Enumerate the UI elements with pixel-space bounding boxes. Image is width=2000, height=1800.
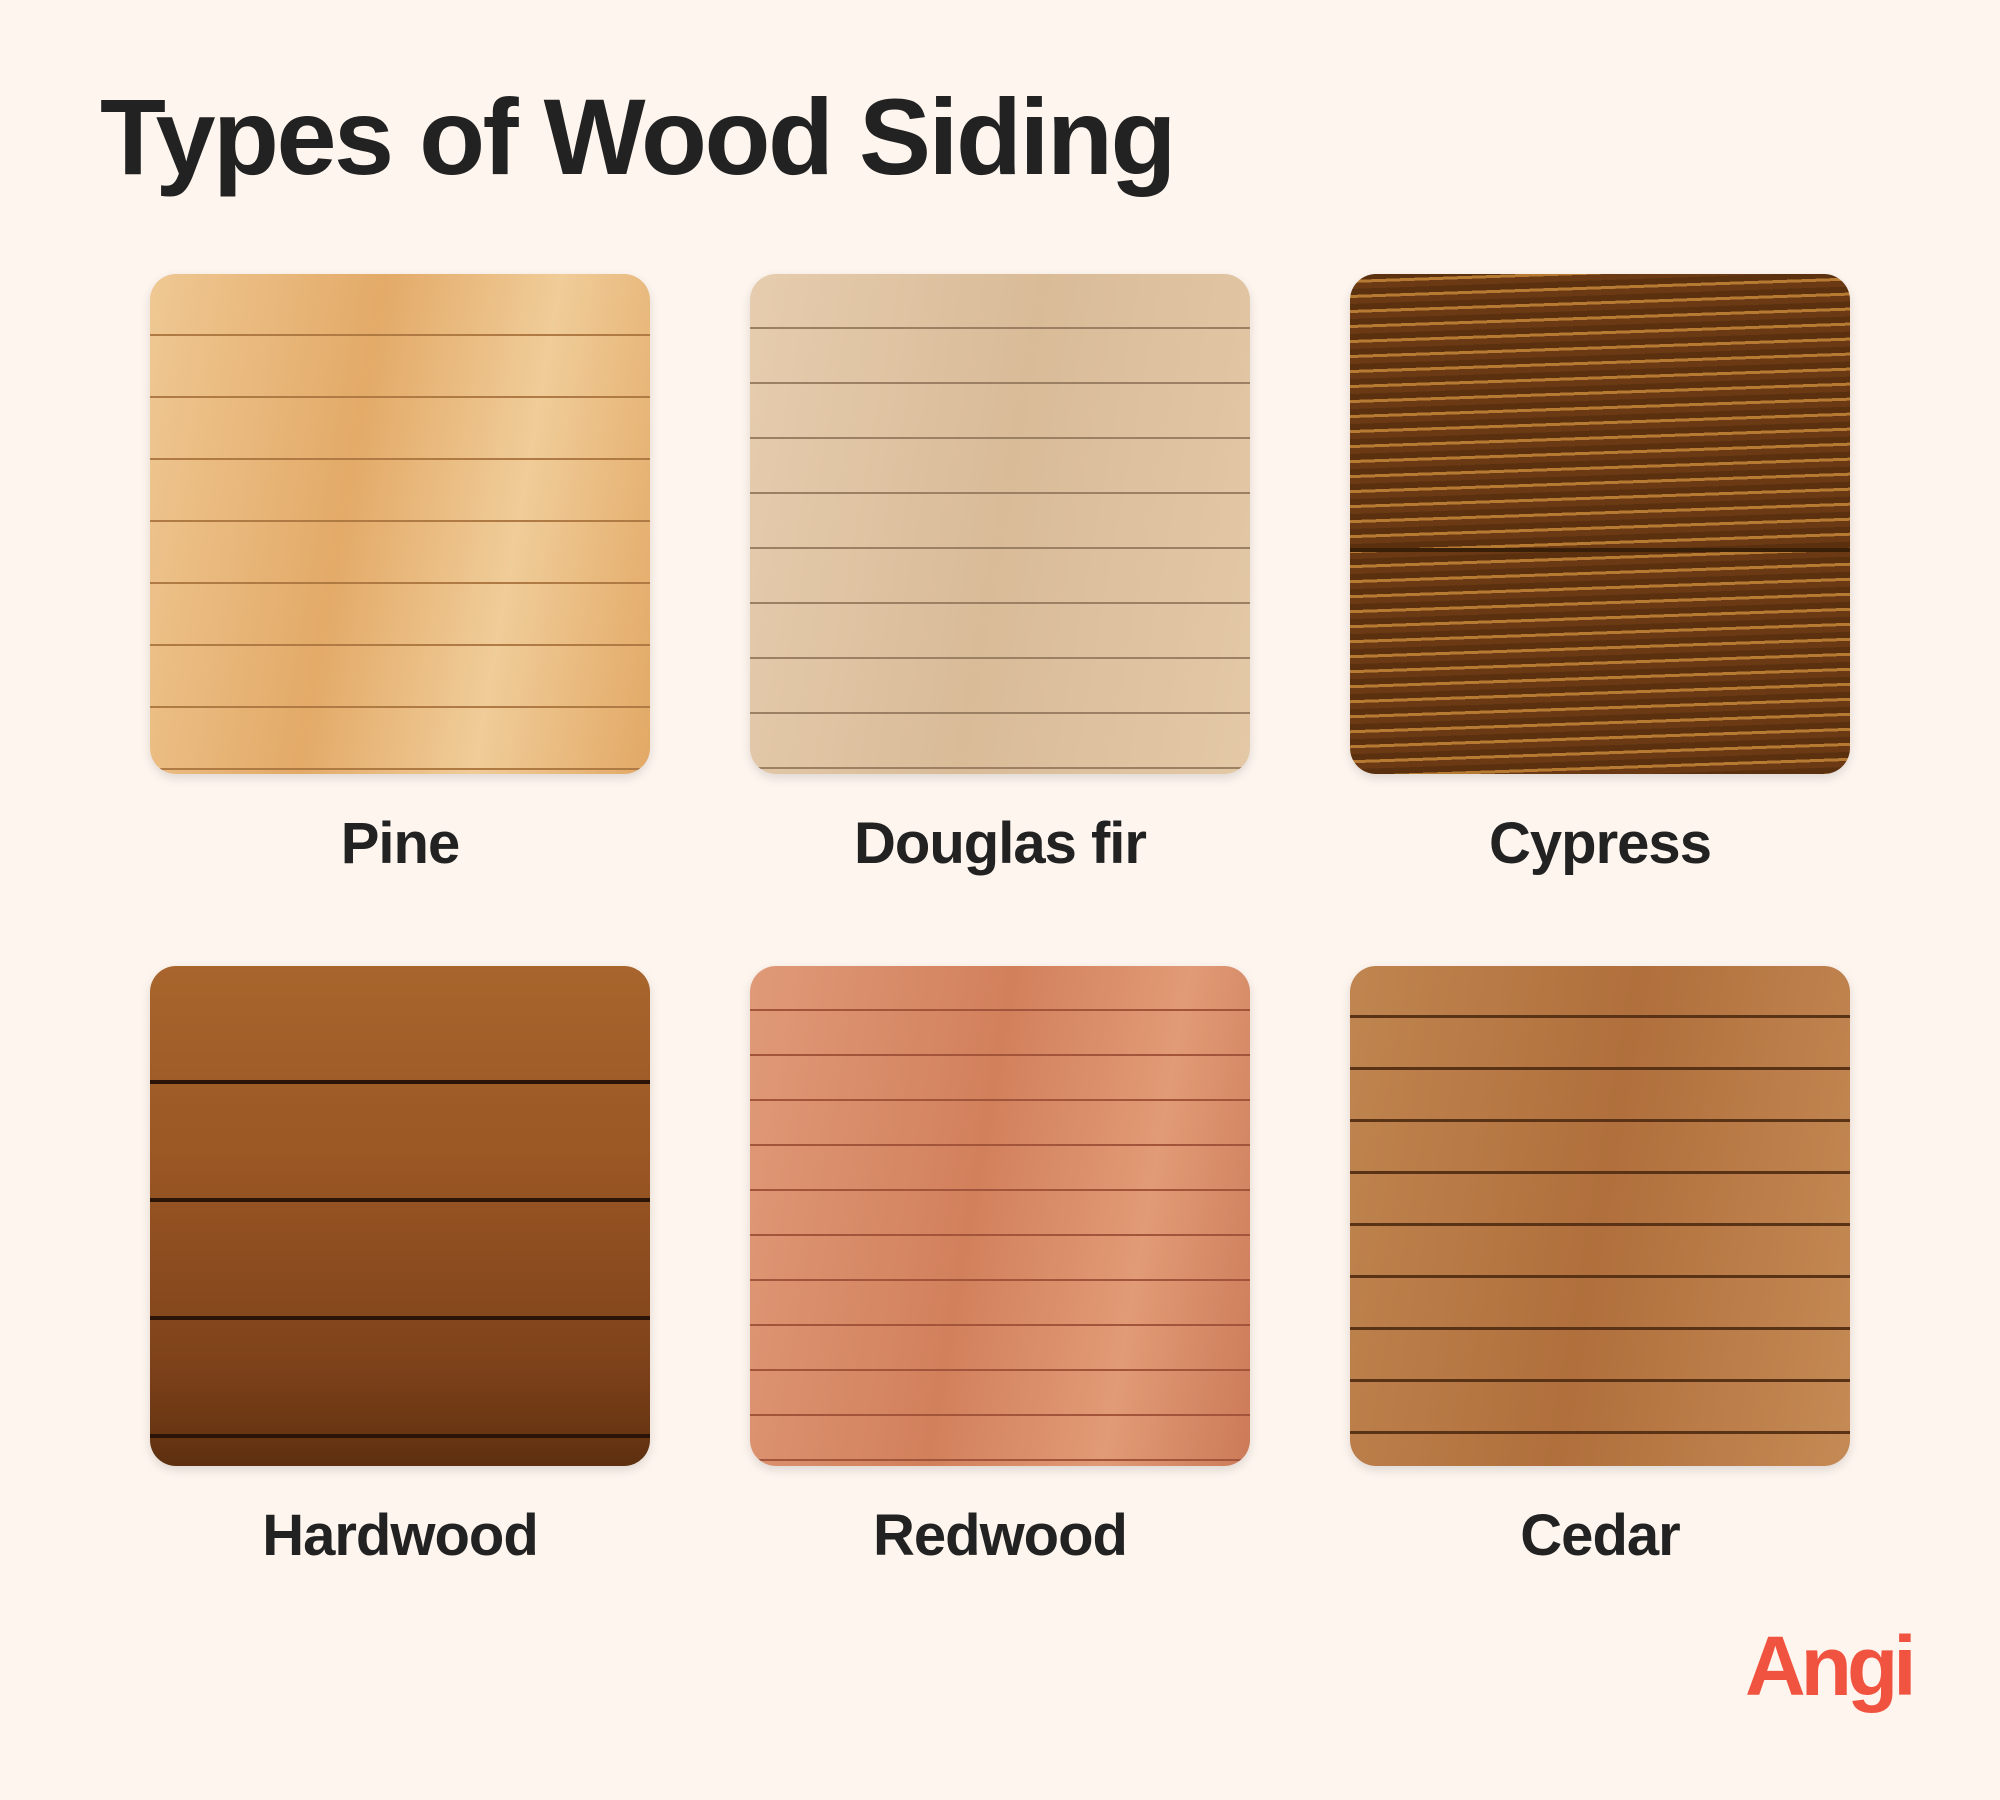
label: redwood: Redwood xyxy=(873,1503,1127,1568)
title: Types of Wood Siding xyxy=(100,76,1174,197)
label: pine: Pine xyxy=(341,811,459,876)
tile: douglas fir xyxy=(750,274,1250,774)
tile: hardwood xyxy=(150,966,650,1466)
label: douglas fir: Douglas fir xyxy=(854,811,1146,876)
tile: cedar xyxy=(1350,966,1850,1466)
tile: cypress xyxy=(1350,274,1850,774)
tile: pine xyxy=(150,274,650,774)
logo: Angi: Angi xyxy=(1745,1619,1912,1713)
tile: redwood xyxy=(750,966,1250,1466)
label: cypress: Cypress xyxy=(1489,811,1711,876)
label: hardwood: Hardwood xyxy=(262,1503,538,1568)
label: cedar: Cedar xyxy=(1520,1503,1680,1568)
